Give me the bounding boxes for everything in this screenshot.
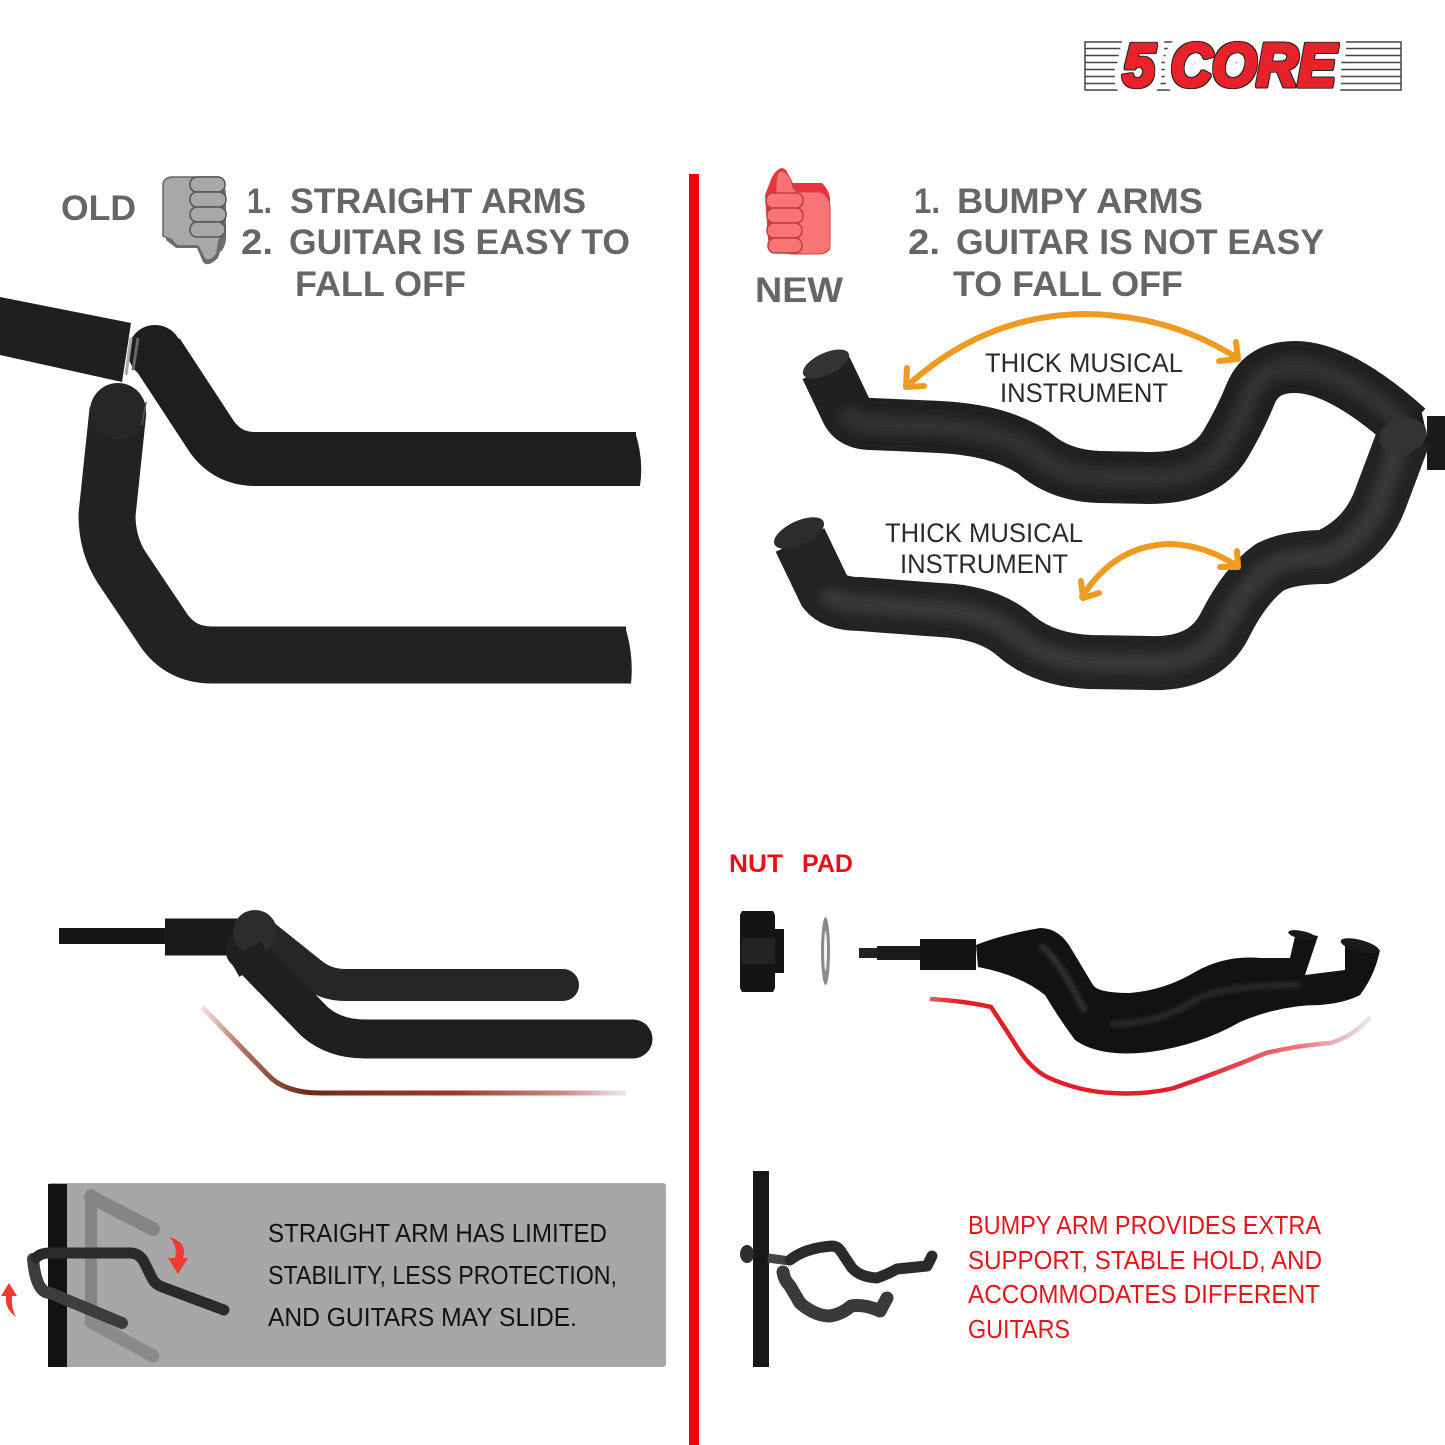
icon: pad washer	[821, 917, 830, 985]
new list: 2.	[908, 223, 940, 262]
curve: bumpy profile line	[930, 999, 1370, 1093]
label: thick musical instrument upper: THICK MUSICAL	[985, 348, 1183, 378]
icon: thumbs down	[163, 177, 226, 264]
callout text: STRAIGHT ARM HAS LIMITED	[268, 1218, 607, 1248]
callout text: AND GUITARS MAY SLIDE.	[268, 1302, 577, 1332]
label: thick musical instrument lower: INSTRUMENT	[900, 549, 1068, 579]
callout text: bumpy arm: ACCOMMODATES DIFFERENT	[968, 1279, 1320, 1309]
center divider	[689, 174, 699, 1445]
callout text: bumpy arm	[968, 1210, 1322, 1344]
logo: 5 CORE: 5 CORE	[1123, 32, 1338, 99]
panel: old design	[0, 177, 666, 1367]
photo: new bumpy arms	[769, 343, 1445, 663]
old list: STRAIGHT ARMS	[290, 182, 586, 221]
new list: TO FALL OFF	[953, 265, 1183, 304]
labels: nut and pad	[729, 850, 853, 878]
icon: red up arrow	[1, 1283, 17, 1317]
old list: 2.	[241, 223, 273, 262]
black rocking arm	[33, 1253, 224, 1323]
callout text: bumpy arm: GUITARS	[968, 1314, 1070, 1344]
new list: GUITAR IS NOT EASY	[956, 223, 1324, 262]
new list: 1.	[914, 182, 940, 221]
new list: BUMPY ARMS	[957, 182, 1203, 221]
old list: GUITAR IS EASY TO	[289, 223, 630, 262]
photo: new arm side view	[859, 928, 1381, 1054]
photo: old arms side view	[59, 910, 633, 1039]
labels: nut and pad: PAD	[802, 850, 853, 878]
photo: new arm on post	[740, 1171, 932, 1367]
arrow: narrow orange span	[1081, 544, 1238, 598]
ghost arm positions	[91, 1195, 153, 1356]
label: OLD: OLD	[61, 189, 136, 228]
icon: thumbs up	[765, 168, 830, 254]
label: thick musical instrument lower	[885, 518, 1083, 579]
label: NEW: NEW	[755, 271, 843, 310]
old list: 1.	[247, 182, 272, 221]
panel: straight arm callout	[33, 1183, 666, 1367]
icon: nut	[740, 911, 784, 992]
callout text: STABILITY, LESS PROTECTION,	[268, 1260, 617, 1290]
panel: new design	[729, 168, 1445, 1367]
labels: nut and pad: NUT	[729, 850, 783, 878]
label: thick musical instrument lower: THICK MUSICAL	[885, 518, 1083, 548]
label: thick musical instrument upper: INSTRUMENT	[1000, 378, 1168, 408]
photo: old straight arms	[0, 297, 641, 684]
icon: red down arrow	[168, 1237, 188, 1274]
arrow: wide orange span	[906, 314, 1238, 387]
old list	[241, 182, 630, 304]
label: thick musical instrument upper	[985, 348, 1183, 408]
callout text: bumpy arm: BUMPY ARM PROVIDES EXTRA	[968, 1210, 1322, 1240]
callout text	[268, 1218, 617, 1332]
callout text: bumpy arm: SUPPORT, STABLE HOLD, AND	[968, 1245, 1322, 1275]
curve: straight profile line	[202, 1007, 626, 1093]
old list: FALL OFF	[295, 265, 466, 304]
new list	[908, 182, 1324, 304]
